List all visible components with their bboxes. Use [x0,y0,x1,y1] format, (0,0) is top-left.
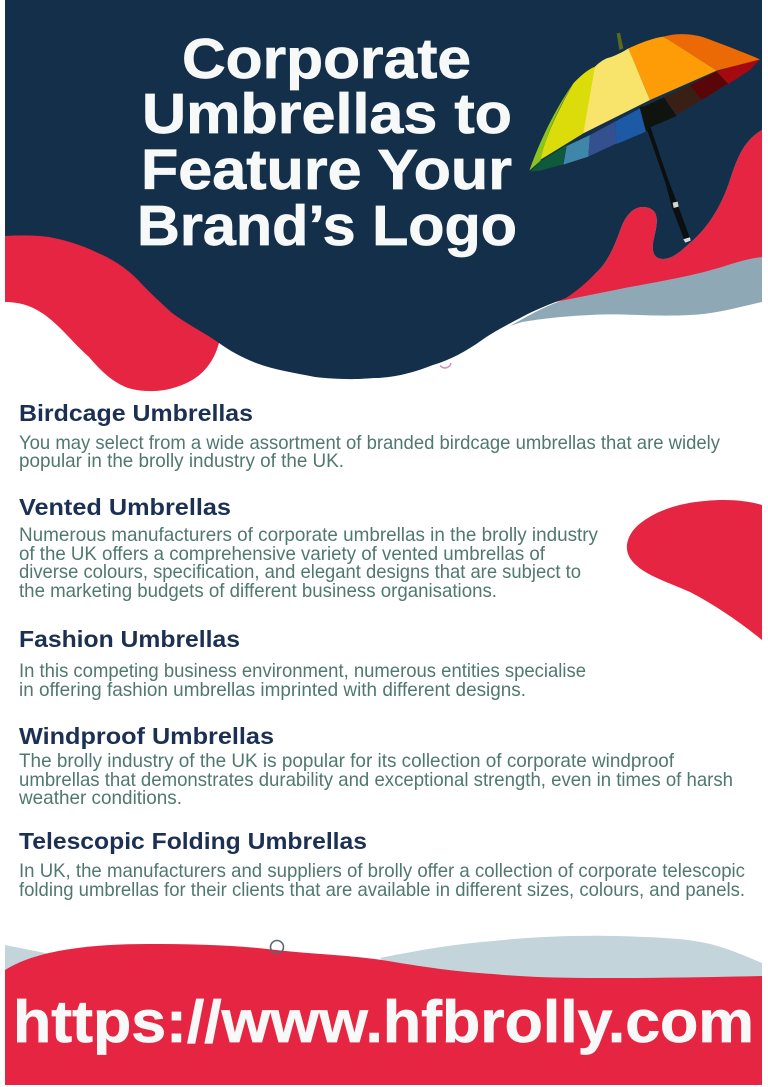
header panel [5,0,762,391]
title [137,27,517,258]
body text: folding umbrellas for their clients that are available in different sizes, colours, and panels. [19,879,745,901]
heading: Telescopic Folding Umbrellas [19,828,367,854]
right red wave [555,130,762,302]
section: Fashion Umbrellas [19,626,586,701]
body text: Numerous manufacturers of corporate umbrellas in the brolly industry [19,524,598,546]
body text [19,432,720,472]
heading: Vented Umbrellas [19,494,231,520]
section: Telescopic Folding Umbrellas [19,828,745,901]
section: Birdcage Umbrellas [19,400,720,472]
left red wave [5,230,240,391]
red footer [5,944,762,1085]
website url: https://www.hfbrolly.com [13,989,754,1055]
body text [19,860,745,901]
title: Corporate [182,27,471,91]
heading: Birdcage Umbrellas [19,400,253,426]
heading: Windproof Umbrellas [19,723,274,749]
grey wave [510,252,762,326]
section: Windproof Umbrellas [18,723,733,809]
body text: popular in the brolly industry of the UK. [19,450,344,472]
body text: weather conditions. [18,787,182,809]
body text: the marketing budgets of different business organisations. [19,580,497,602]
body text: umbrellas that demonstrates durability and exceptional strength, even in times of harsh [19,769,733,791]
small ring [270,940,284,954]
left grey wave [5,945,50,972]
body text: diverse colours, specification, and elegant designs that are subject to [19,561,581,583]
right grey wave [380,936,762,980]
right red blob [627,500,762,640]
footer panel [5,936,762,1085]
section: Vented Umbrellas [19,494,598,602]
small ring [438,355,452,369]
title: Umbrellas to [142,82,512,146]
body text [19,660,586,701]
title: Brand’s Logo [137,194,517,258]
body text: You may select from a wide assortment of branded birdcage umbrellas that are widely [19,432,720,454]
body text: In this competing business environment, numerous entities specialise [19,660,586,682]
body text [18,750,733,809]
body text: of the UK offers a comprehensive variety of vented umbrellas of [19,543,546,565]
title: Feature Your [141,138,512,202]
heading: Fashion Umbrellas [19,626,240,652]
body text: In UK, the manufacturers and suppliers of brolly offer a collection of corporate telescopic [19,860,745,882]
body text [19,524,598,602]
body text: The brolly industry of the UK is popular for its collection of corporate windproof [19,750,675,772]
icon: rainbow umbrella [529,33,760,243]
body text: in offering fashion umbrellas imprinted with different designs. [19,679,526,701]
navy background [5,0,762,379]
